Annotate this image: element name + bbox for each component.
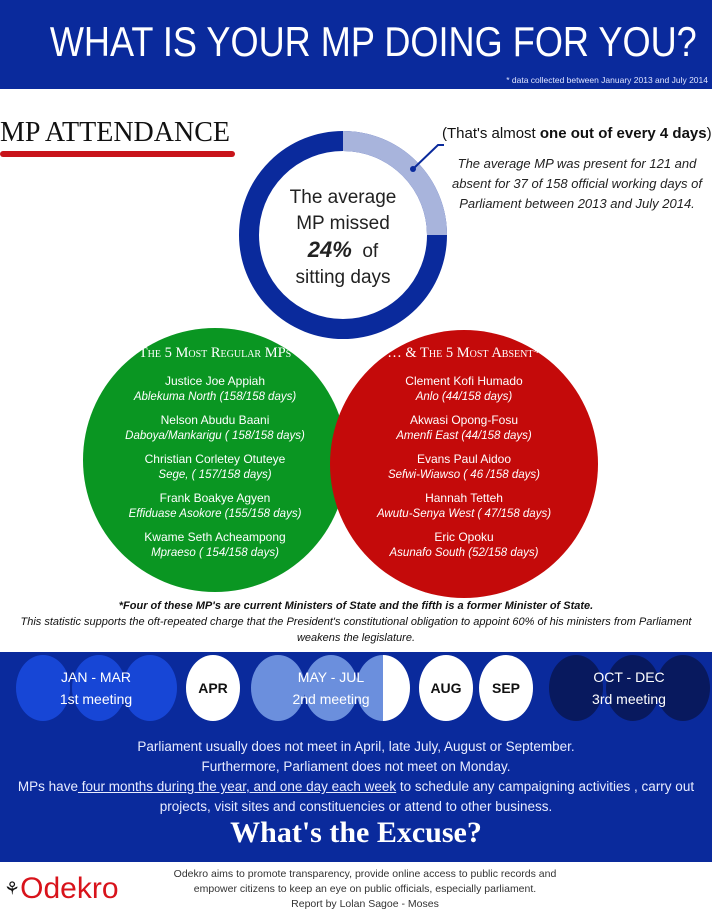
absent list: Awutu-Senya West ( 47/158 days)	[377, 508, 551, 520]
regular list: Sege, ( 157/158 days)	[158, 469, 272, 481]
schedule text: MPs have four months during the year, and one day each week to schedule any campaigning activities , carry out projects, visit sites and constituencies or attend to other business.	[18, 779, 694, 814]
months row: MAY - JUL	[298, 669, 364, 685]
footer text: Odekro aims to promote transparency, provide online access to public records and empower citizens to keep an eye on public officials, especially parliament.	[174, 868, 556, 895]
panel: most regular	[83, 328, 347, 592]
callout: (That's almost one out of every 4 days)	[442, 125, 712, 142]
regular list: Daboya/Mankarigu ( 158/158 days)	[125, 430, 305, 442]
header band	[0, 0, 712, 89]
absent list: … & The 5 Most Absent*	[387, 345, 541, 361]
schedule text	[18, 739, 694, 814]
regular list: Mpraeso ( 154/158 days)	[151, 547, 279, 559]
months row: 2nd meeting	[292, 691, 370, 707]
footnote: This statistic supports the oft-repeated charge that the President's constitutional obligation to appoint 60% of his ministers from Parliament weakens the legislature.	[20, 616, 692, 644]
absent list: Amenfi East (44/158 days)	[396, 430, 532, 442]
regular list: Christian Corletey Otuteye	[145, 452, 285, 466]
regular list: Justice Joe Appiah	[165, 374, 265, 388]
footer text: Report by Lolan Sagoe - Moses	[291, 898, 439, 910]
title: WHAT IS YOUR MP DOING FOR YOU?	[50, 18, 697, 65]
blue band: calendar	[0, 652, 712, 862]
callout: The average MP was present for 121 and absent for 37 of 158 official working days of Parliament between 2013 and July 2014.	[452, 156, 702, 211]
regular list	[125, 345, 305, 559]
donut center text: The average MP missed 24% of sitting days	[290, 187, 396, 288]
regular list: Nelson Abudu Baani	[161, 413, 269, 427]
months row: 1st meeting	[60, 691, 132, 707]
absent list: Anlo (44/158 days)	[416, 391, 512, 403]
schedule text: Parliament usually does not meet in April, late July, August or September.	[137, 739, 575, 754]
donut chart	[239, 131, 447, 339]
heading: MP attendance: MP ATTENDANCE	[0, 117, 230, 148]
regular list: The 5 Most Regular MPs	[139, 345, 291, 361]
callout	[410, 125, 712, 211]
regular list: Frank Boakye Agyen	[160, 491, 270, 505]
data note: * data collected between January 2013 and July 2014	[506, 75, 708, 85]
absent list: Akwasi Opong-Fosu	[410, 413, 518, 427]
absent list	[376, 345, 551, 559]
months row: JAN - MAR	[61, 669, 131, 685]
regular list: Kwame Seth Acheampong	[144, 530, 286, 544]
months row: APR	[198, 680, 228, 696]
footer text	[174, 868, 556, 910]
absent list: Clement Kofi Humado	[405, 374, 523, 388]
absent list: Eric Opoku	[434, 530, 494, 544]
absent list: Asunafo South (52/158 days)	[390, 547, 538, 559]
footnote	[20, 600, 692, 644]
regular list: Effiduase Asokore (155/158 days)	[129, 508, 301, 520]
months row: SEP	[492, 680, 520, 696]
logo: Odekro: ⚘Odekro	[4, 872, 119, 905]
months row: OCT - DEC	[593, 669, 665, 685]
excuse heading: What's the Excuse?	[230, 816, 482, 849]
months row: AUG	[430, 680, 462, 696]
footnote: *Four of these MP's are current Ministers of State and the fifth is a former Minister of State.	[119, 600, 593, 612]
panel: most absent	[330, 330, 598, 598]
regular list: Ablekuma North (158/158 days)	[134, 391, 296, 403]
absent list: Sefwi-Wiawso ( 46 /158 days)	[388, 469, 540, 481]
absent list: Hannah Tetteh	[425, 491, 503, 505]
months row	[16, 655, 710, 721]
schedule text: Furthermore, Parliament does not meet on Monday.	[202, 759, 510, 774]
absent list: Evans Paul Aidoo	[417, 452, 511, 466]
months row: 3rd meeting	[592, 691, 666, 707]
